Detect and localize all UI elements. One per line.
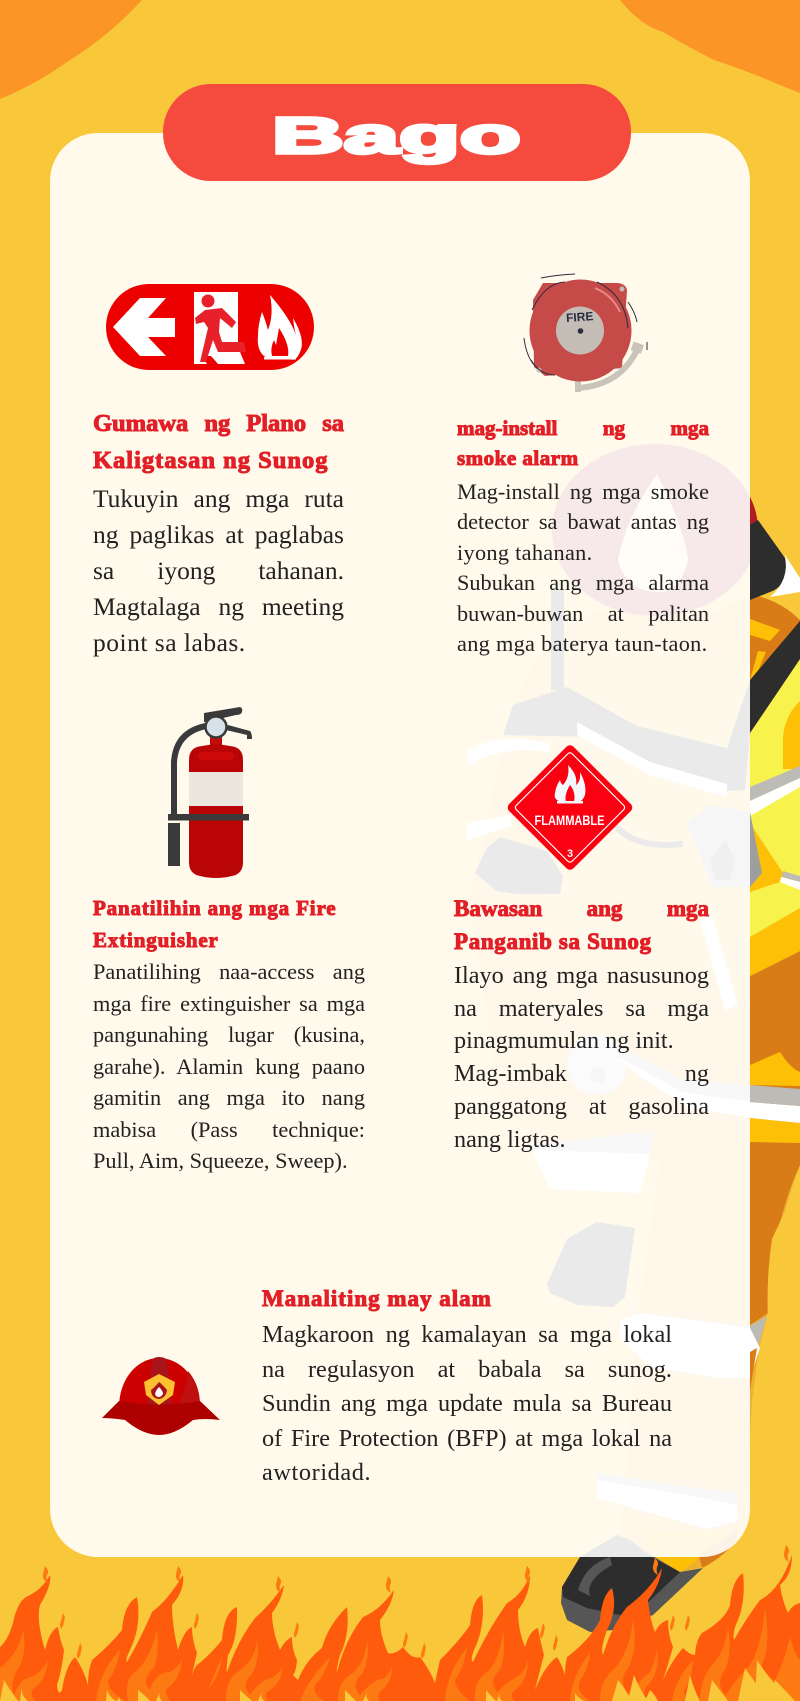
text: reduce fire hazards: Mag-imbak ng [454, 1060, 709, 1087]
text: stay informed: Magkaroon ng kamalayan sa mga lokal [262, 1321, 672, 1348]
text: stay informed: of Fire Protection (BFP) at mga lokal na [262, 1424, 672, 1452]
heading: fire extinguishers: Extinguisher [93, 928, 219, 952]
text: smoke alarm: detector sa bawat antas ng [457, 509, 709, 534]
text: smoke alarm: Subukan ang mga alarma [457, 570, 709, 595]
text: fire extinguishers: pangunahing lugar (kusina, [93, 1022, 365, 1047]
text: fire safety plan: Magtalaga ng meeting [93, 592, 344, 621]
lower legs [532, 1131, 653, 1154]
heading: reduce fire hazards: Panganib sa Sunog [454, 929, 652, 954]
heading: smoke alarm [457, 416, 710, 470]
heading: fire safety plan [92, 410, 344, 474]
icon: fire alarm bell: FIRE [566, 309, 594, 325]
icon: firefighter helmet [102, 1357, 220, 1435]
text: fire safety plan: point sa labas. [93, 628, 246, 657]
text: fire safety plan: Tukuyin ang mga ruta [93, 484, 344, 513]
icon: flammable diamond [508, 745, 632, 870]
text: reduce fire hazards: nang ligtas. [454, 1126, 566, 1153]
icon: fire extinguisher [168, 707, 252, 878]
heading: stay informed: Manaliting may alam [262, 1286, 492, 1311]
forearm and sleeve bands [700, 915, 738, 1011]
text: fire safety plan: ng paglikas at paglabas [93, 520, 344, 549]
hose arc [610, 819, 683, 845]
heading: reduce fire hazards: Bawasan ang mga [454, 896, 709, 921]
icon: flammable diamond: 3 [567, 848, 573, 860]
text: fire extinguishers: garahe). Alamin kung paano [93, 1054, 365, 1078]
text: stay informed: na regulasyon at babala sa sunog. [262, 1356, 672, 1382]
text: reduce fire hazards [454, 962, 709, 1153]
text: fire extinguishers: mabisa (Pass technique: [93, 1116, 365, 1142]
background: orange corners [0, 0, 800, 99]
text: stay informed: Sundin ang mga update mula sa Bureau [262, 1390, 672, 1417]
text: stay informed: awtoridad. [262, 1459, 371, 1486]
helmet of firefighter [552, 444, 758, 616]
title pill [163, 84, 631, 181]
heading: reduce fire hazards [454, 896, 710, 954]
text: reduce fire hazards: Ilayo ang mga nasusunog [454, 962, 709, 989]
text: fire extinguishers: Panatilihing naa-access ang [93, 959, 365, 984]
chest lower bands [617, 1056, 800, 1123]
heading: fire extinguishers: Panatilihin ang mga Fire [93, 896, 336, 920]
text: fire extinguishers: gamitin ang mga ito nang [93, 1085, 365, 1110]
heading: fire safety plan: Gumawa ng Plano sa [93, 410, 344, 437]
flames along bottom [0, 1545, 800, 1701]
icon: exit sign [106, 284, 314, 370]
boot [561, 1535, 703, 1632]
text: smoke alarm: iyong tahanan. [457, 540, 592, 565]
text: reduce fire hazards: na materyales sa mga [454, 995, 709, 1022]
text: fire extinguishers: Pull, Aim, Squeeze, Sweep). [93, 1148, 348, 1173]
text: stay informed [262, 1321, 672, 1486]
text: fire extinguishers [93, 959, 365, 1173]
text: smoke alarm: Mag-install ng mga smoke [457, 479, 709, 504]
text: fire safety plan: sa iyong tahanan. [93, 556, 344, 585]
text: reduce fire hazards: panggatong at gasolina [454, 1093, 709, 1120]
heading: fire safety plan: Kaligtasan ng Sunog [93, 446, 328, 474]
text: smoke alarm: buwan-buwan at palitan [457, 601, 709, 626]
title pill: Bago [272, 107, 521, 164]
icon: flammable diamond: FLAMMABLE [534, 812, 604, 828]
heading: smoke alarm: mag-install ng mga [457, 416, 709, 440]
heading: smoke alarm: smoke alarm [457, 446, 579, 470]
text: fire extinguishers: mga fire extinguisher sa mga [93, 990, 365, 1016]
text: smoke alarm [457, 479, 709, 656]
panel: main card [50, 133, 750, 1557]
heading: fire extinguishers [92, 896, 336, 952]
text: fire safety plan [93, 484, 344, 657]
text: reduce fire hazards: pinagmumulan ng init. [454, 1027, 674, 1054]
gloves [475, 837, 563, 894]
icon: fire alarm bell [524, 274, 648, 392]
text: smoke alarm: ang mga baterya taun-taon. [457, 631, 708, 656]
